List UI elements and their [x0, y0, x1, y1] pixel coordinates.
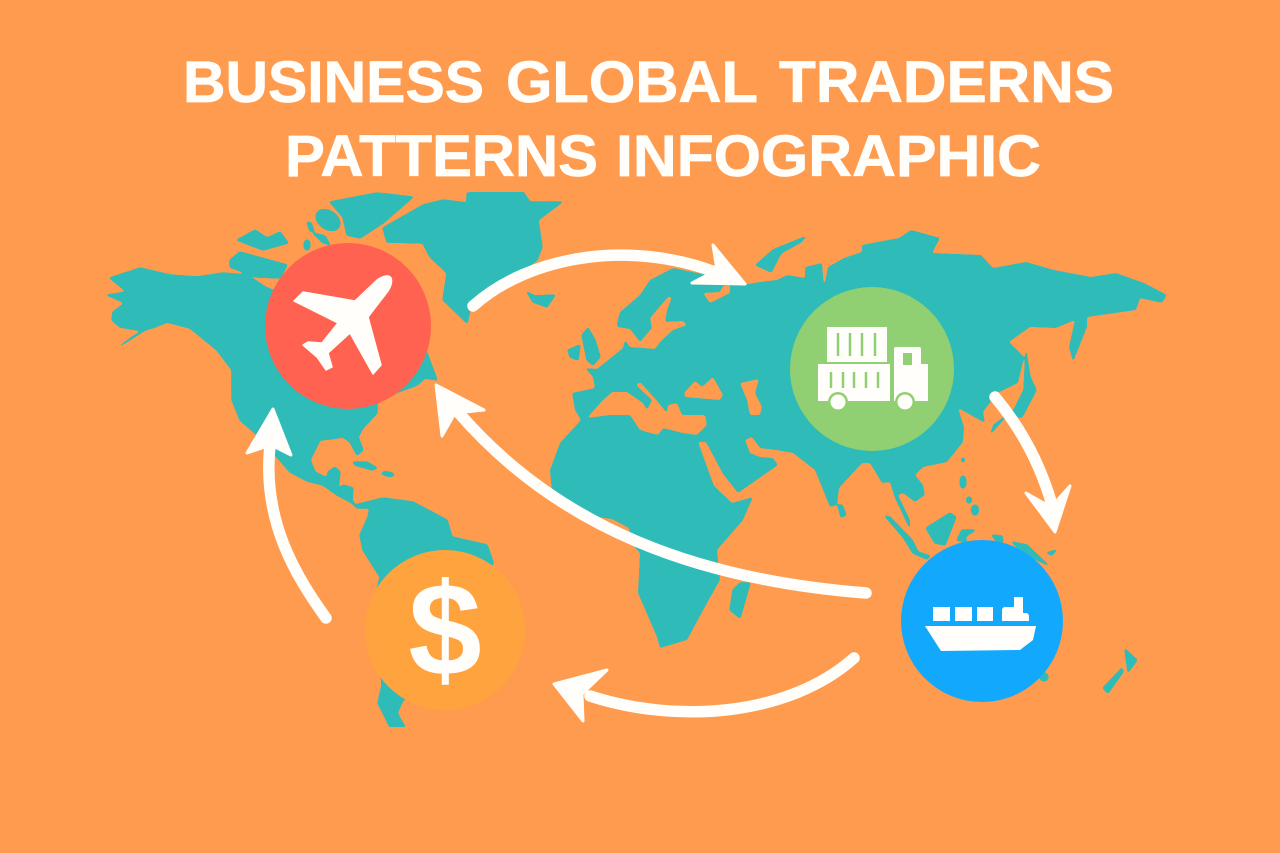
map: Novaya Zemlya: [756, 237, 805, 272]
ship hull: [925, 626, 1036, 651]
title: INFOGRAPHIC: [616, 124, 1041, 189]
upper container: [827, 327, 887, 362]
lower container: [818, 364, 890, 401]
map: Caribbean islands: [353, 462, 394, 477]
arrow: Eurasia to Oceania: [995, 397, 1070, 532]
map: Iceland: [527, 292, 555, 307]
map: South America: [360, 498, 493, 727]
title: TRADERNS: [779, 50, 1114, 115]
map: Eurasia and Africa with inland seas as holes: [550, 230, 1167, 648]
ship superstructure: [1002, 597, 1029, 621]
map: North and Central America: [107, 268, 437, 520]
title: [183, 50, 1114, 189]
map: Arctic islands: [230, 193, 413, 278]
icon: container truck badge: [790, 287, 954, 451]
ship cargo boxes: [933, 607, 993, 621]
map: Greenland: [383, 192, 562, 323]
truck wheels: [828, 392, 915, 412]
map: Madagascar: [730, 583, 750, 618]
arrow: South America to North America: [247, 409, 326, 618]
icon: cargo ship badge: [901, 540, 1063, 702]
icon: dollar badge: $: [408, 556, 482, 703]
map: Sri Lanka: [838, 505, 846, 517]
map: Indonesia and Philippines: [885, 458, 1056, 565]
map: Japan and Sakhalin: [991, 352, 1036, 433]
map: Australia edge: [1040, 673, 1048, 681]
icon: dollar badge: [365, 550, 525, 710]
title: BUSINESS: [183, 50, 484, 115]
icon: airplane badge: [265, 243, 431, 409]
map: New Zealand: [1103, 649, 1137, 693]
arrow: Oceania to South America: [554, 658, 854, 721]
truck cab: [894, 347, 928, 401]
world map: [107, 192, 1167, 727]
arrow: Oceania to North America: [436, 385, 866, 593]
arrow: North America to Eurasia: [473, 245, 745, 306]
title: PATTERNS: [285, 124, 598, 189]
map: British Isles: [568, 328, 600, 365]
title: GLOBAL: [506, 50, 758, 115]
